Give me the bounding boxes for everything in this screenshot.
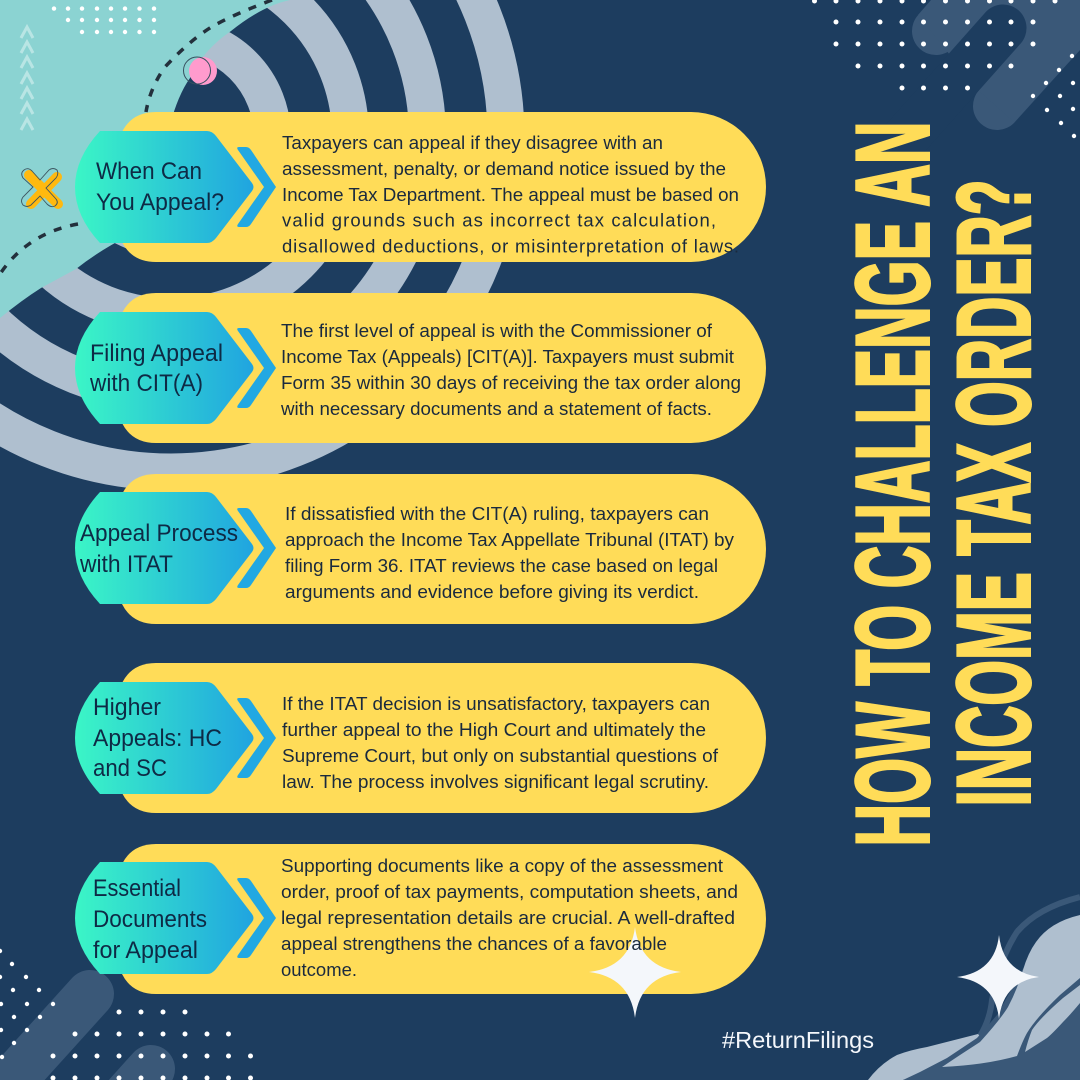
text block: valid grounds such as incorrect tax calculation, xyxy=(282,210,716,230)
heading: for Appeal xyxy=(93,937,198,964)
panel: Essential Documents xyxy=(75,844,766,1018)
heading: You Appeal? xyxy=(96,189,224,216)
heading: with ITAT xyxy=(79,551,173,578)
icon: pink circle xyxy=(184,57,217,85)
heading: with CIT(A) xyxy=(89,370,203,397)
text block: order, proof of tax payments, computation sheets, and xyxy=(281,881,738,902)
text block: appeal strengthens the chances of a favorable xyxy=(281,933,667,954)
heading xyxy=(93,875,207,964)
pills top right xyxy=(900,0,1080,144)
heading: Appeal Process xyxy=(80,520,238,547)
text block: The first level of appeal is with the Commissioner of xyxy=(281,320,713,341)
text block: Income Tax Department. The appeal must be based on xyxy=(282,184,739,205)
panel: Appeal Process with ITAT xyxy=(75,474,766,624)
text block: Income Tax (Appeals) [CIT(A)]. Taxpayers must submit xyxy=(281,346,734,367)
title xyxy=(836,122,1052,846)
panel: Higher Appeals xyxy=(75,663,766,813)
text block: assessment, penalty, or demand notice issued by the xyxy=(282,158,726,179)
teal blob xyxy=(0,0,290,318)
text block: Taxpayers can appeal if they disagree with an xyxy=(282,132,663,153)
text block: outcome. xyxy=(281,959,357,980)
heading: When Can xyxy=(96,158,202,185)
dashed line lower xyxy=(0,224,78,274)
heading xyxy=(79,520,238,578)
waves bottom right xyxy=(868,897,1080,1080)
text block: with necessary documents and a statement of facts. xyxy=(280,398,712,419)
heading: Appeals: HC xyxy=(93,725,222,752)
text block xyxy=(282,693,719,792)
dots top left xyxy=(52,6,156,34)
text block: legal representation details are crucial. A well-drafted xyxy=(281,907,735,928)
text block: If the ITAT decision is unsatisfactory, taxpayers can xyxy=(282,693,710,714)
heading: Essential xyxy=(93,875,181,902)
icon: star right xyxy=(957,935,1039,1019)
text block: law. The process involves significant legal scrutiny. xyxy=(282,771,709,792)
text block: filing Form 36. ITAT reviews the case based on legal xyxy=(285,555,718,576)
text block: Form 35 within 30 days of receiving the tax order along xyxy=(281,372,741,393)
text block xyxy=(281,855,738,980)
text block: further appeal to the High Court and ultimately the xyxy=(282,719,706,740)
heading xyxy=(96,158,224,216)
text block xyxy=(280,320,741,419)
panel: When Can You Appeal xyxy=(75,112,766,262)
chevrons column xyxy=(21,27,33,130)
text block: disallowed deductions, or misinterpretation of laws. xyxy=(282,236,739,256)
text block: If dissatisfied with the CIT(A) ruling, taxpayers can xyxy=(285,503,709,524)
icon: cross xyxy=(22,168,58,207)
heading: and SC xyxy=(93,755,167,782)
heading xyxy=(89,340,223,397)
heading: Documents xyxy=(93,906,207,933)
panel: Filing Appeal with CIT(A) xyxy=(75,293,766,443)
icon: star on card xyxy=(589,927,681,1018)
text block xyxy=(285,503,735,602)
dashed line upper xyxy=(146,0,272,112)
text block: Supporting documents like a copy of the assessment xyxy=(281,855,723,876)
text block xyxy=(282,132,739,256)
dots bottom left xyxy=(0,949,253,1080)
heading xyxy=(93,694,222,782)
text block: approach the Income Tax Appellate Tribunal (ITAT) by xyxy=(285,529,735,550)
hashtag: #ReturnFilings xyxy=(722,1027,874,1053)
concentric rings xyxy=(0,0,506,472)
heading: Higher xyxy=(93,694,161,721)
heading: Filing Appeal xyxy=(90,340,223,367)
text block: Supreme Court, but only on substantial questions of xyxy=(282,745,719,766)
text block: arguments and evidence before giving its verdict. xyxy=(285,581,699,602)
dots top right xyxy=(812,0,1076,138)
pills bottom left xyxy=(0,994,151,1080)
